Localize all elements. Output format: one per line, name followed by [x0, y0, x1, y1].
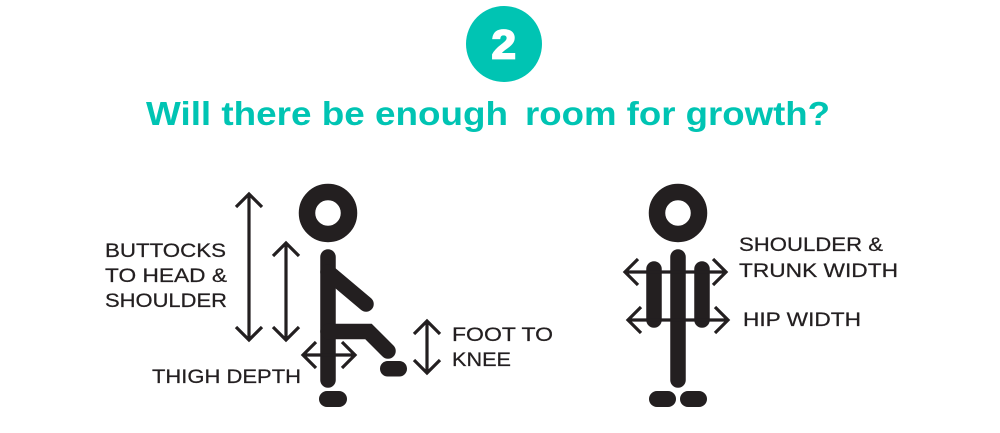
arrow: foot to knee: [414, 321, 440, 373]
arrow: thigh depth: [303, 342, 355, 368]
icon: side figure raised foot: [380, 361, 407, 376]
icon: front figure right foot: [680, 391, 707, 407]
icon: front figure right arm: [694, 269, 710, 320]
label: buttocks to head and shoulder: [105, 240, 227, 312]
icon: side figure leg: [328, 332, 388, 351]
label: foot to knee: KNEE: [452, 349, 511, 371]
label: shoulder and trunk width: [739, 234, 898, 282]
icon: side figure head: [307, 192, 349, 234]
step number badge: 2: [492, 22, 516, 68]
arrow: shoulder and trunk width: [625, 259, 726, 285]
label: buttocks to head and shoulder: SHOULDER: [105, 290, 227, 312]
icon: front figure left arm: [646, 269, 662, 320]
label: hip width: HIP WIDTH: [743, 309, 861, 331]
label: shoulder and trunk width: TRUNK WIDTH: [739, 260, 898, 282]
label: foot to knee: FOOT TO: [452, 324, 553, 346]
arrow: buttocks to head: [236, 194, 262, 340]
icon: side figure standing foot: [319, 391, 347, 407]
title: room for growth?: [525, 95, 830, 132]
step number badge: [466, 6, 542, 82]
icon: front figure left foot: [649, 391, 676, 407]
title: Will there be enough: [146, 95, 508, 132]
title: [146, 95, 830, 132]
icon: side figure arm: [328, 272, 366, 304]
label: thigh depth: THIGH DEPTH: [152, 366, 301, 388]
icon: front figure head: [657, 192, 699, 234]
label: shoulder and trunk width: SHOULDER &: [739, 234, 883, 256]
panel: side view seated figure: [105, 192, 553, 407]
icon: front figure torso: [670, 257, 686, 380]
panel: front view standing figure: [625, 192, 898, 407]
icon: side figure torso: [320, 257, 336, 380]
arrow: hip width: [628, 307, 728, 333]
label: buttocks to head and shoulder: BUTTOCKS: [105, 240, 226, 262]
label: buttocks to head and shoulder: TO HEAD &: [105, 265, 227, 287]
arrow: buttocks to shoulder: [273, 243, 299, 340]
label: foot to knee: [452, 324, 553, 371]
